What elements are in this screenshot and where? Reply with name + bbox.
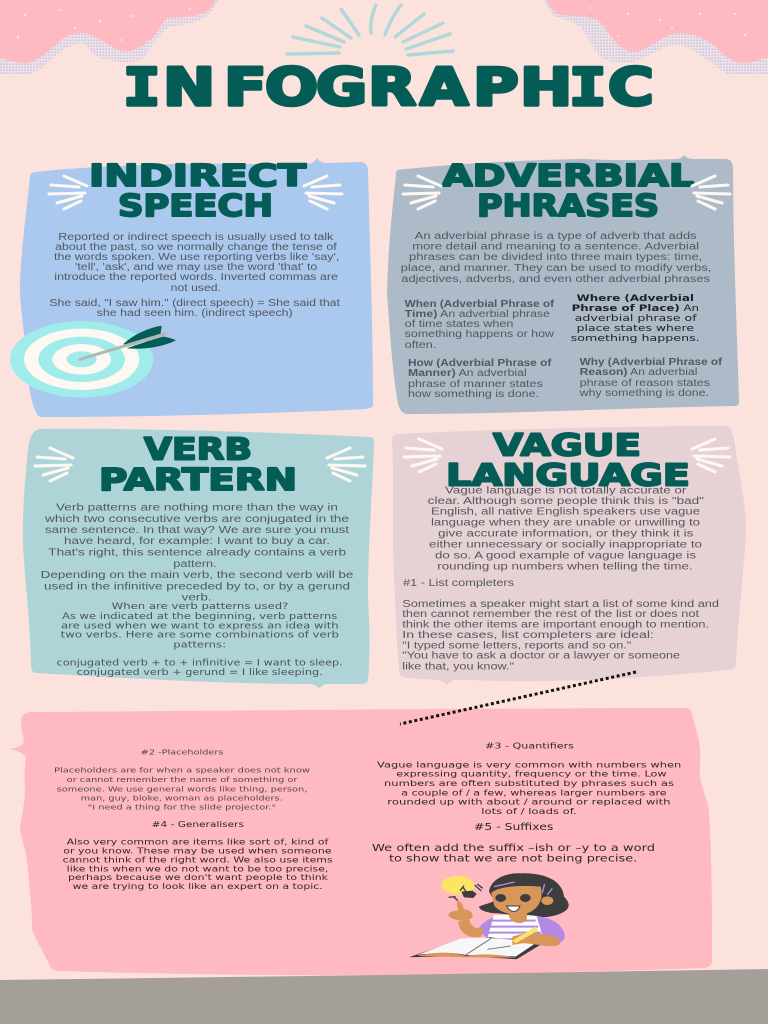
body text: Reported or indirect speech is usually used to talk (58, 232, 333, 243)
text: generalisers (63, 820, 333, 891)
text: quantifiers: a couple of / a few, whereas larger numbers are (401, 788, 667, 797)
panel background (392, 426, 746, 685)
icon: right sparks (304, 176, 342, 209)
text: generalisers: we are trying to look like an expert on a topic. (73, 882, 323, 891)
intro text: adjectives, adverbs, and even other adverbial phrases (401, 274, 710, 285)
body text: used in the infinitive preceded by to, or by a gerund (44, 581, 350, 592)
title: A (420, 57, 469, 118)
text: why: phrase of reason states (580, 378, 710, 389)
body text: same sentence. In that way? We are sure you must (45, 525, 349, 536)
body text: about the past, so we normally change the tense of (55, 242, 337, 253)
heading: SPEECH (118, 189, 273, 224)
icon: sun rays (287, 5, 453, 55)
text: placeholders: or cannot remember the name of something or (67, 775, 299, 784)
text: why: why something is done. (578, 388, 709, 399)
text: why (578, 357, 723, 399)
text: when: something happens or how (405, 329, 555, 340)
dotted connector line (400, 672, 636, 724)
icon: right sparks (692, 439, 730, 472)
raised arm and hand (458, 918, 484, 937)
text: where (571, 293, 700, 344)
title: C (608, 57, 654, 118)
panel background (20, 158, 373, 417)
icon: target with arrow (10, 321, 176, 398)
text: why: Reason) An adverbial (580, 367, 697, 378)
text: usage: two verbs. Here are some combinations of verb (61, 631, 340, 641)
text: placeholders: #2 -Placeholders (141, 747, 224, 756)
neck and face (509, 910, 527, 923)
text: list completers: "I typed some letters, reports and so on." (402, 641, 632, 652)
text: when: often. (405, 340, 436, 351)
text: suffixes: #5 - Suffixes (474, 822, 553, 833)
bulb (441, 876, 475, 895)
body text: she had seen him. (indirect speech) (97, 308, 293, 319)
text: placeholders (54, 747, 310, 811)
text: how: How (Adverbial Phrase of (408, 358, 552, 369)
body text: verb. (182, 593, 212, 604)
text: suffixes: to show that we are not being precise. (389, 854, 637, 865)
body text: Depending on the main verb, the second verb will be (41, 570, 353, 581)
text: generalisers: perhaps because we don't want people to think (68, 873, 329, 882)
text: generalisers: like this when we do not want to be too precise, (67, 864, 328, 873)
text: usage: conjugated verb + gerund = I like sleeping. (77, 668, 323, 678)
body text: have heard, for example: I want to buy a car. (64, 536, 330, 547)
body text: do so. A good example of vague language is (435, 550, 696, 561)
text: list completers: then cannot remember the rest of the list or does not (402, 609, 699, 620)
panel: vague language (392, 426, 746, 685)
text: usage: conjugated verb + to + infinitive = I want to sleep. (57, 658, 343, 668)
body text: 'tell', 'ask', and we may use the word 'that' to (75, 262, 317, 273)
body text: That's right, this sentence already contains a verb (48, 547, 346, 558)
heading: VAGUE (493, 428, 641, 464)
body text: not used. (171, 283, 221, 294)
body text: Verb patterns are nothing more than the way in (56, 503, 338, 514)
title: F (224, 57, 267, 118)
text: usage: patterns: (173, 640, 226, 650)
body text (428, 485, 705, 573)
text: usage: As we indicated at the beginning, verb patterns (62, 612, 338, 622)
panel background (387, 155, 739, 414)
text: quantifiers: lots of / loads of. (481, 807, 577, 816)
heading: PARTERN (99, 463, 297, 498)
text: where: Where (Adverbial (577, 293, 694, 304)
icon: right sparks (692, 176, 730, 209)
panel background (10, 708, 712, 975)
text: list completers (402, 578, 719, 673)
title: H (520, 57, 572, 118)
title: I (123, 57, 161, 118)
torso (477, 915, 565, 946)
heading: VERB (144, 432, 252, 468)
book (409, 937, 541, 959)
panel: vague language continued (10, 708, 712, 975)
writing hand and pencil (512, 933, 560, 946)
heading: LANGUAGE (446, 458, 690, 494)
body text: which two consecutive verbs are conjugated in the (44, 514, 349, 525)
text: how: phrase of manner states (408, 379, 543, 390)
icon: right sparks (327, 448, 365, 481)
body text: Vague language is not totally accurate or (445, 485, 687, 496)
text: how: Manner) An adverbial (408, 368, 527, 379)
panel: verb pattern (23, 429, 374, 688)
text: when: When (Adverbial Phrase of (405, 299, 555, 310)
body text: either unnecessary or socially inappropriate to (429, 540, 702, 551)
intro text: phrases can be divided into three main types: time, (409, 252, 702, 263)
hair back (479, 873, 569, 917)
text: generalisers: #4 - Generalisers (152, 820, 244, 829)
text: usage: When are verb patterns used? (112, 602, 289, 612)
text: why: Why (Adverbial Phrase of (580, 357, 723, 368)
text: usage: are used when we want to express an idea with (61, 621, 339, 631)
text: placeholders: Placeholders are for when a speaker does not know (54, 765, 310, 774)
heading: PHRASES (477, 189, 659, 224)
body text: introduce the reported words. Inverted commas are (54, 272, 338, 283)
panel: adverbial phrases (387, 155, 739, 414)
text: suffixes (372, 822, 655, 865)
intro text: place, and manner. They can be used to modify verbs, (401, 263, 711, 274)
text: when: Time) An adverbial phrase (405, 309, 550, 320)
text: how: how something is done. (408, 389, 539, 400)
title: R (368, 57, 416, 118)
panel: indirect speech (10, 158, 373, 417)
text: usage (57, 602, 343, 678)
icon: left sparks (49, 176, 87, 209)
heading: INDIRECT (89, 159, 307, 194)
text: when: of time states when (405, 319, 513, 330)
text: quantifiers: rounded up with about / around or replaced with (387, 798, 671, 807)
heading (89, 159, 307, 224)
body text (41, 503, 353, 604)
title: I (569, 57, 607, 118)
text: placeholders: man, guy, bloke, woman as placeholders. (81, 793, 283, 802)
text: list completers: #1 - List completers (403, 578, 514, 589)
text: suffixes: We often add the suffix –ish or –y to a word (372, 843, 655, 854)
icon: left sparks (404, 439, 442, 472)
text: quantifiers: numbers are often substituted by phrases such as (384, 779, 674, 788)
ground band (0, 969, 768, 1024)
body text: She said, "I saw him." (direct speech) = She said that (49, 298, 340, 309)
decoration: top left cloud (0, 0, 218, 74)
text: list completers: In these cases, list completers are ideal: (402, 630, 654, 641)
text: list completers: think the other items are important enough to mention. (402, 620, 709, 631)
text: quantifiers: #3 - Quantifiers (485, 742, 574, 751)
text: where: place states where (577, 323, 694, 334)
body text: language when they are unable or unwilling to (431, 518, 700, 529)
text: quantifiers: expressing quantity, frequency or the time. Low (396, 770, 667, 779)
heading: ADVERBIAL (442, 159, 694, 194)
body text: give accurate information, or they think it is (438, 528, 694, 539)
text: quantifiers: Vague language is very common with numbers when (377, 761, 681, 770)
text: generalisers: Also very common are items like sort of, kind of (67, 838, 329, 847)
title: P (473, 57, 519, 118)
text: how (408, 358, 552, 400)
text: list completers: "You have to ask a doctor or a lawyer or someone (402, 651, 680, 662)
text: list completers: like that, you know." (402, 662, 515, 673)
body text: English, all native English speakers use vague (431, 507, 700, 518)
title: G (316, 57, 367, 118)
icon: left sparks (35, 448, 73, 481)
body text: the words spoken. We use reporting verbs like 'say', (54, 252, 339, 263)
text: where: Phrase of Place) An (572, 303, 699, 314)
heading (99, 432, 297, 498)
intro text: more detail and meaning to a sentence. Adverbial (412, 242, 699, 252)
title: N (163, 57, 215, 118)
decoration: top right cloud (544, 0, 768, 74)
panel background (23, 429, 374, 688)
icon: girl with light bulb and book (409, 873, 569, 959)
text: when (405, 299, 555, 351)
body text: clear. Although some people think this is "bad" (428, 496, 705, 507)
text: generalisers: or you know. These may be used when someone (63, 847, 332, 856)
text: list completers: Sometimes a speaker might start a list of some kind and (402, 599, 719, 610)
body text: rounding up numbers when telling the time. (437, 562, 693, 573)
text: quantifiers (377, 742, 681, 816)
text: placeholders: "I need a thing for the slide projector." (88, 802, 276, 811)
title: O (265, 57, 318, 118)
heading (442, 159, 694, 224)
text: generalisers: cannot think of the right word. We also use items (63, 855, 333, 864)
intro text (401, 231, 711, 285)
body text (49, 232, 340, 319)
heading (446, 428, 690, 494)
body text: pattern. (173, 559, 217, 570)
text: placeholders: someone. We use general words like thing, person, (57, 784, 307, 793)
icon: left sparks (403, 176, 441, 209)
text: where: something happens. (571, 333, 700, 344)
text: where: adverbial phrase of (575, 313, 698, 324)
intro text: An adverbial phrase is a type of adverb that adds (415, 231, 697, 242)
